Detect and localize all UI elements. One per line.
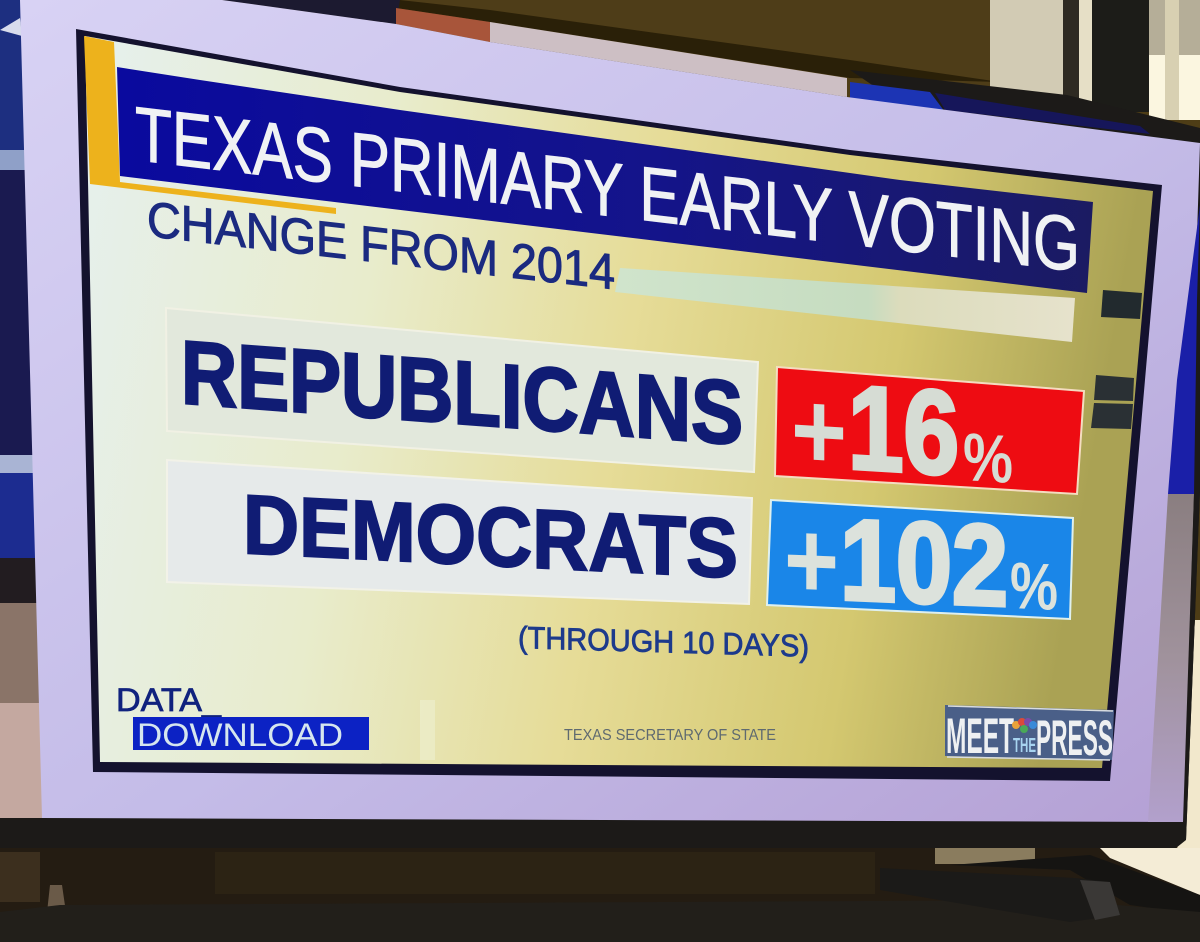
subtitle band [615,268,1075,342]
header bar [117,67,1093,293]
Democrats value: + [784,498,839,623]
Democrats label box [167,460,752,604]
Republicans value [791,361,959,501]
reflected strips above bezel [396,8,490,42]
Meet the Press logo: MEET [946,708,1014,764]
Republicans row [166,308,1084,501]
remote control [880,868,1120,922]
indicator box upper [1101,290,1142,319]
stand and shelf [0,848,1200,942]
icon: NBC peacock [1012,718,1037,733]
Republicans value box [775,367,1084,494]
light patch [420,700,435,760]
Democrats row [167,460,1073,631]
Republicans label box [166,308,758,472]
footnote: (THROUGH 10 DAYS) [518,620,809,664]
Democrats label: DEMOCRATS [243,477,738,596]
Republicans percent: % [963,419,1013,498]
Data Download logo [116,682,369,753]
Democrats value box [767,500,1073,619]
orange accent [84,36,336,214]
graphic background [85,36,1153,768]
Data Download logo: DATA_ [116,682,222,718]
subtitle: CHANGE FROM 2014 [147,191,615,300]
Republicans label: REPUBLICANS [181,322,743,465]
Democrats value: 102 [840,496,1008,631]
Meet the Press logo: THE [1013,735,1036,757]
Data Download logo: DOWNLOAD [137,717,343,753]
Republicans value: + [791,368,847,494]
Democrats percent: % [1010,548,1058,624]
indicator box lower [1091,375,1134,429]
Republicans value: 16 [848,361,959,501]
screen graphic [76,29,1162,781]
Democrats value [784,496,1008,631]
source: TEXAS SECRETARY OF STATE [564,727,776,744]
graphic border [76,29,1162,781]
right side screen content [1148,205,1200,840]
